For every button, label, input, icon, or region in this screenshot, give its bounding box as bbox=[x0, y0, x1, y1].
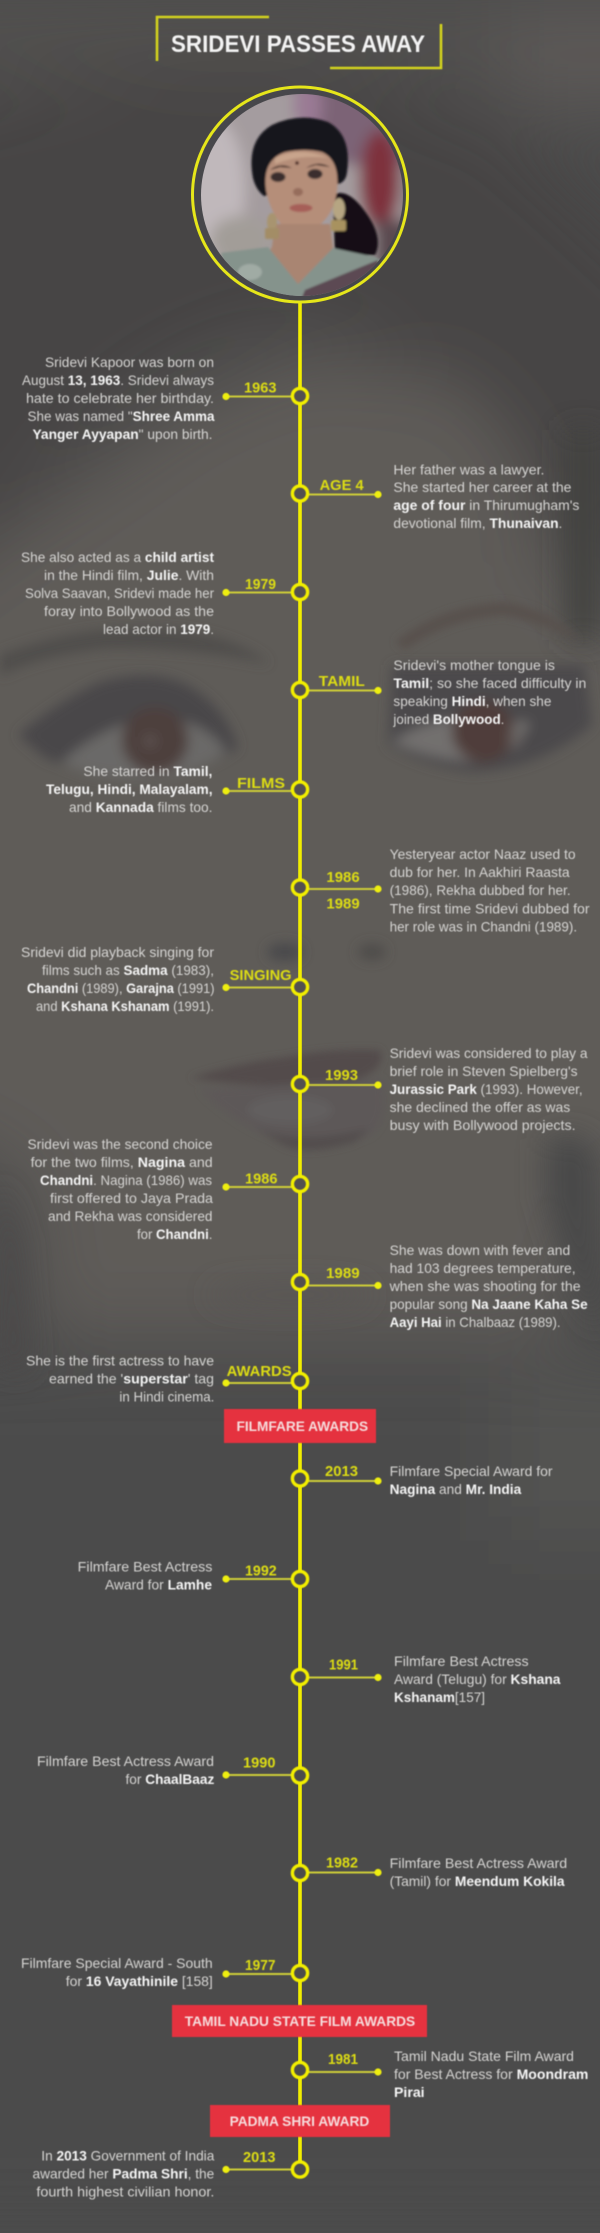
title text: SRIDEVI PASSES AWAY bbox=[171, 31, 425, 58]
description: and Rekha was considered bbox=[48, 1208, 212, 1224]
description bbox=[26, 1352, 214, 1404]
description: foray into Bollywood as the bbox=[44, 603, 214, 619]
description: Sridevi was the second choice bbox=[28, 1136, 213, 1152]
description: Sridevi was considered to play a bbox=[390, 1045, 588, 1061]
description: Award for Lamhe bbox=[105, 1576, 212, 1592]
description bbox=[390, 1045, 588, 1133]
description: dub for her. In Aakhiri Raasta bbox=[390, 864, 570, 880]
year label: TAMIL bbox=[319, 673, 365, 690]
description: had 103 degrees temperature, bbox=[390, 1260, 576, 1276]
entry: 1977 bbox=[21, 1955, 308, 1989]
entry: tamil bbox=[292, 657, 586, 727]
year label: 1986 bbox=[245, 1170, 278, 1188]
description: and Kannada films too. bbox=[69, 799, 212, 815]
entry: age 4 bbox=[292, 462, 579, 531]
description bbox=[390, 1463, 553, 1497]
description: Filmfare Special Award for bbox=[390, 1463, 553, 1479]
banner: padma shri award bbox=[210, 2105, 390, 2137]
description: Filmfare Best Actress bbox=[394, 1653, 529, 1669]
description bbox=[46, 763, 212, 815]
description: Filmfare Best Actress bbox=[78, 1558, 212, 1574]
description: Solva Saavan, Sridevi made her bbox=[25, 585, 214, 601]
description: In 2013 Government of India bbox=[41, 2148, 214, 2164]
year label: 1986 bbox=[326, 869, 360, 886]
entry: 1989 fever bbox=[292, 1242, 588, 1330]
description bbox=[37, 1753, 214, 1787]
description: She started her career at the bbox=[393, 479, 572, 495]
entry: 1991 bbox=[292, 1653, 561, 1705]
right eye bbox=[388, 665, 592, 772]
entry: 1993 bbox=[292, 1045, 588, 1133]
entry: 1990 bbox=[37, 1753, 308, 1787]
description: Filmfare Best Actress Award bbox=[37, 1753, 214, 1769]
description: hate to celebrate her birthday. bbox=[26, 390, 214, 406]
entry: singing bbox=[21, 944, 308, 1014]
year label: AWARDS bbox=[227, 1363, 292, 1380]
description: August 13, 1963. Sridevi always bbox=[22, 372, 214, 388]
description: popular song Na Jaane Kaha Se bbox=[390, 1296, 588, 1312]
description: Nagina and Mr. India bbox=[390, 1481, 521, 1497]
entry: 1979 bbox=[21, 549, 308, 637]
description bbox=[390, 846, 590, 934]
description: her role was in Chandni (1989). bbox=[390, 918, 577, 934]
banner: tamil nadu state film awards: TAMIL NADU STATE FILM AWARDS bbox=[185, 2013, 415, 2029]
description: Yesteryear actor Naaz used to bbox=[390, 846, 576, 862]
description: earned the 'superstar' tag bbox=[49, 1370, 214, 1386]
left eyebrow bbox=[0, 628, 270, 676]
description: in the Hindi film, Julie. With bbox=[44, 567, 214, 583]
description: She was down with fever and bbox=[390, 1242, 570, 1258]
description: Pirai bbox=[394, 2084, 425, 2100]
description bbox=[392, 657, 586, 727]
entry: 1981 bbox=[292, 2048, 588, 2100]
year label: 1981 bbox=[328, 2051, 358, 2068]
year label: 1977 bbox=[245, 1957, 276, 1974]
lips bbox=[190, 1050, 384, 1150]
description: devotional film, Thunaivan. bbox=[393, 515, 562, 531]
description: She starred in Tamil, bbox=[83, 763, 212, 779]
description bbox=[21, 549, 214, 637]
description: Tamil; so she faced difficulty in bbox=[393, 675, 586, 691]
description: age of four in Thirumugham's bbox=[393, 497, 579, 513]
description: (Tamil) for Meendum Kokila bbox=[390, 1873, 565, 1889]
description: for ChaalBaaz bbox=[126, 1771, 214, 1787]
description: first offered to Jaya Prada bbox=[50, 1190, 213, 1206]
description: in Hindi cinema. bbox=[119, 1388, 214, 1404]
timeline spine bbox=[298, 300, 302, 2169]
description bbox=[32, 2148, 215, 2200]
right side dark hair bbox=[566, 430, 600, 640]
description: Sridevi did playback singing for bbox=[21, 944, 214, 960]
description: Kshanam[157] bbox=[394, 1689, 485, 1705]
description: Yanger Ayyapan" upon birth. bbox=[32, 426, 212, 442]
description: joined Bollywood. bbox=[392, 711, 504, 727]
description bbox=[21, 944, 214, 1014]
description bbox=[393, 462, 579, 531]
description: She is the first actress to have bbox=[26, 1352, 214, 1368]
description: for Chandni. bbox=[137, 1226, 212, 1242]
description bbox=[394, 2048, 588, 2100]
description: speaking Hindi, when she bbox=[393, 693, 552, 709]
description: for the two films, Nagina and bbox=[31, 1154, 213, 1170]
description: Her father was a lawyer. bbox=[393, 462, 544, 478]
description: Sridevi's mother tongue is bbox=[393, 657, 555, 673]
left eye bbox=[18, 675, 238, 779]
description: Filmfare Special Award - South bbox=[21, 1955, 213, 1971]
entry: 2013 padma shri bbox=[32, 2148, 308, 2200]
entry: awards bbox=[26, 1352, 308, 1404]
year label: 1991 bbox=[329, 1656, 358, 1674]
description: when she was shooting for the bbox=[389, 1278, 581, 1294]
description: she declined the offer as was bbox=[390, 1099, 570, 1115]
description: Telugu, Hindi, Malayalam, bbox=[46, 781, 212, 797]
entry: 1982 bbox=[292, 1854, 567, 1889]
nose shadows bbox=[267, 943, 386, 961]
year label: 1982 bbox=[326, 1854, 358, 1872]
description bbox=[389, 1242, 588, 1330]
title with bracket bbox=[157, 17, 441, 68]
second year label: 1989 bbox=[326, 896, 360, 912]
year label: AGE 4 bbox=[320, 477, 364, 494]
year label: 1993 bbox=[325, 1067, 358, 1084]
description bbox=[28, 1136, 213, 1242]
entry: 1986 second choice bbox=[28, 1136, 308, 1242]
right eyebrow bbox=[395, 602, 580, 650]
description bbox=[394, 1653, 561, 1705]
banner: filmfare awards bbox=[224, 1409, 376, 1443]
description: brief role in Steven Spielberg's bbox=[390, 1063, 578, 1079]
description: Filmfare Best Actress Award bbox=[390, 1855, 567, 1871]
banner: filmfare awards: FILMFARE AWARDS bbox=[236, 1418, 368, 1434]
description: Chandni (1989), Garajna (1991) bbox=[27, 980, 214, 996]
year label: FILMS bbox=[237, 775, 285, 792]
description: The first time Sridevi dubbed for bbox=[390, 900, 590, 916]
description: and Kshana Kshanam (1991). bbox=[36, 998, 214, 1014]
description: Aayi Hai in Chalbaaz (1989). bbox=[390, 1314, 561, 1330]
description: lead actor in 1979. bbox=[103, 621, 214, 637]
description: Award (Telugu) for Kshana bbox=[394, 1671, 561, 1687]
year label: 1992 bbox=[245, 1562, 277, 1580]
description: Chandni. Nagina (1986) was bbox=[40, 1172, 212, 1188]
year label: 1979 bbox=[245, 576, 276, 593]
entry: 1986 / 1989 dubbing bbox=[292, 846, 590, 934]
year label: 1989 bbox=[326, 1265, 360, 1282]
banner: tamil nadu state film awards bbox=[172, 2005, 427, 2037]
description: Sridevi Kapoor was born on bbox=[45, 354, 214, 370]
entry: 1963 bbox=[22, 354, 308, 442]
description: Jurassic Park (1993). However, bbox=[390, 1081, 583, 1097]
description bbox=[390, 1855, 567, 1889]
description bbox=[22, 354, 215, 442]
description: (1986), Rekha dubbed for her. bbox=[390, 882, 571, 898]
entry: 2013 filmfare bbox=[292, 1463, 553, 1497]
year label: 1963 bbox=[244, 380, 276, 396]
year label: 1990 bbox=[243, 1754, 276, 1772]
banner: padma shri award: PADMA SHRI AWARD bbox=[230, 2113, 369, 2129]
description: busy with Bollywood projects. bbox=[390, 1117, 576, 1133]
description: Tamil Nadu State Film Award bbox=[394, 2048, 574, 2064]
description: She also acted as a child artist bbox=[21, 549, 214, 565]
description: films such as Sadma (1983), bbox=[42, 962, 214, 978]
description: awarded her Padma Shri, the bbox=[32, 2166, 215, 2182]
entry: films bbox=[46, 763, 308, 815]
year label: 2013 bbox=[243, 2149, 276, 2166]
year label: SINGING bbox=[230, 967, 292, 984]
description bbox=[78, 1558, 212, 1592]
entry: 1992 bbox=[78, 1558, 308, 1592]
description bbox=[21, 1955, 213, 1989]
lower face shadows bbox=[0, 1135, 600, 1370]
description: She was named "Shree Amma bbox=[28, 408, 215, 424]
description: for 16 Vayathinile [158] bbox=[66, 1973, 213, 1989]
year label: 2013 bbox=[325, 1463, 358, 1480]
description: for Best Actress for Moondram bbox=[394, 2066, 588, 2082]
description: fourth highest civilian honor. bbox=[36, 2184, 214, 2200]
portrait photo in circle bbox=[191, 86, 409, 304]
